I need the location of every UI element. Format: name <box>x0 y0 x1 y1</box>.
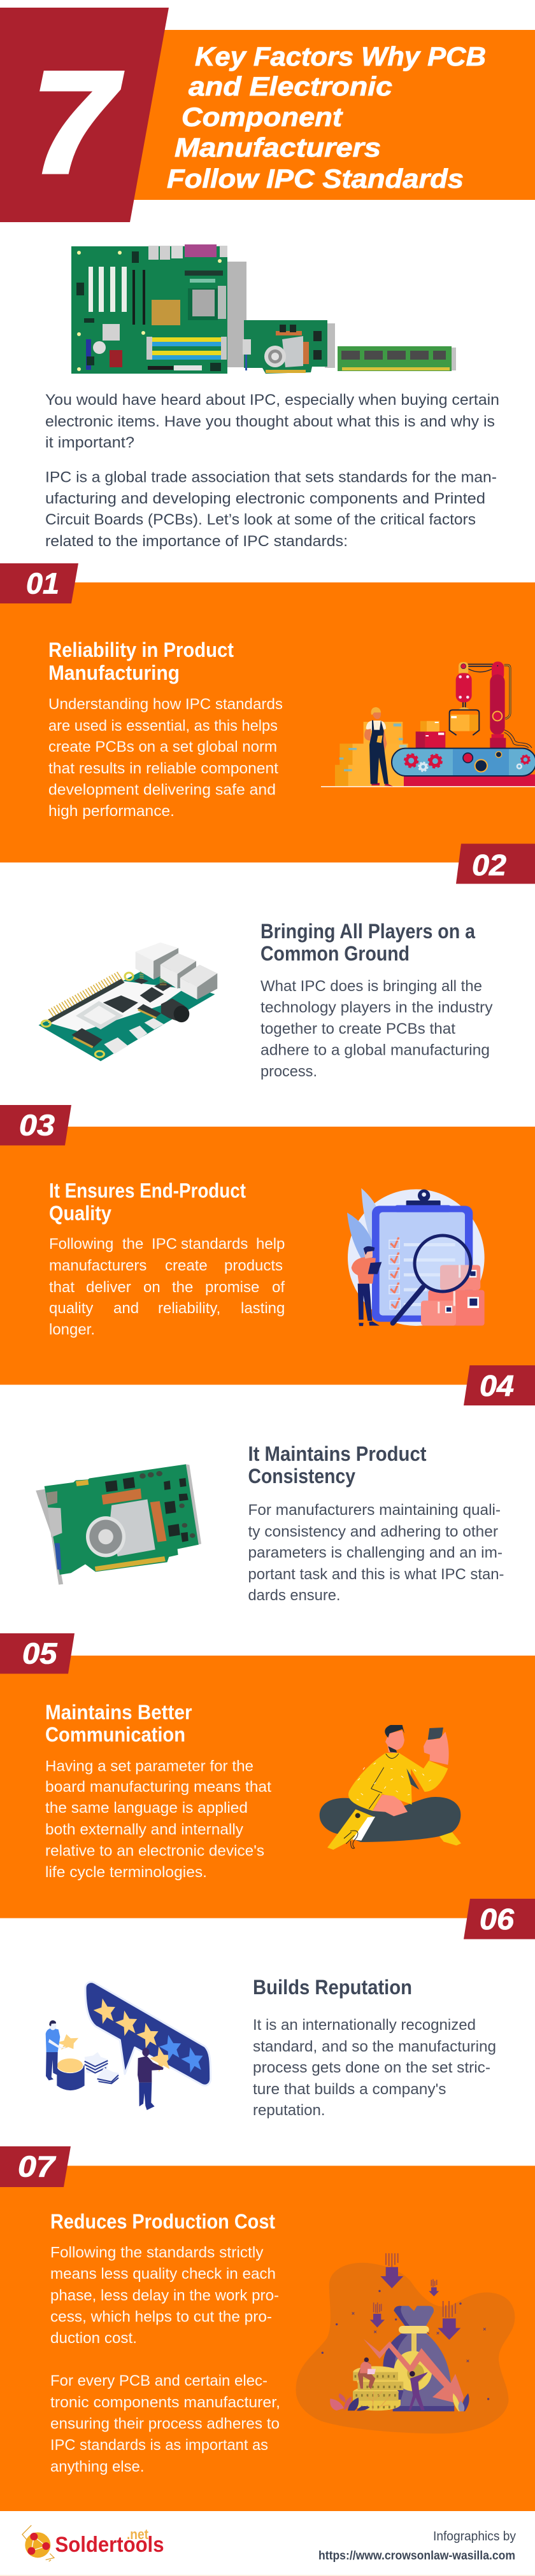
body 05: board manufacturing means that <box>45 1778 271 1796</box>
intro text: electronic items. Have you thought about what this is and why is <box>45 413 495 430</box>
body 04 <box>248 1502 504 1604</box>
body 01: Understanding how IPC standards <box>48 696 283 713</box>
body 01: high performance. <box>48 803 175 820</box>
logo icon <box>22 2525 54 2561</box>
intro text <box>45 391 499 550</box>
body 03: quality <box>49 1300 93 1317</box>
heading 05 <box>45 1701 192 1746</box>
big number 7: 7 <box>32 41 122 202</box>
body 01: create PCBs on a set global norm <box>48 738 277 756</box>
body 04: For manufacturers maintaining quali- <box>248 1502 501 1519</box>
RAM module <box>338 346 456 371</box>
badge 06: 06 <box>480 1903 514 1936</box>
badge 02 <box>456 844 535 883</box>
badge 04 <box>464 1365 535 1405</box>
illustration: single-board computer <box>39 943 217 1061</box>
body 04: ty consistency and adhering to other <box>248 1523 498 1540</box>
body 03: Following <box>49 1235 113 1253</box>
illustration: money bag with falling arrows <box>296 2253 515 2433</box>
motherboard <box>71 244 246 374</box>
body 05: life cycle terminologies. <box>45 1864 207 1881</box>
heading 03: It Ensures End-Product <box>49 1179 246 1202</box>
body 07: Following the standards strictly <box>50 2244 263 2261</box>
heading 01: Reliability in Product <box>48 638 234 661</box>
body 03: create <box>165 1257 208 1274</box>
body 03: longer. <box>49 1321 95 1338</box>
brand name: Soldertools <box>55 2533 164 2557</box>
body 03: promise <box>205 1279 259 1296</box>
body 07: phase, less delay in the work pro- <box>50 2287 279 2304</box>
heading 03: Quality <box>49 1202 111 1225</box>
intro text: You would have heard about IPC, especially when buying certain <box>45 391 499 409</box>
heading 02 <box>260 920 475 965</box>
panel: factor 03 <box>0 1105 535 1385</box>
badge 03: 03 <box>19 1109 55 1142</box>
heading 05: Maintains Better <box>45 1701 192 1724</box>
graphics card <box>243 320 335 374</box>
red slanted panel <box>0 8 169 222</box>
title: Manufacturers <box>175 132 381 162</box>
illustration: seated person with phone <box>320 1725 461 1850</box>
brand suffix: .net <box>127 2526 149 2542</box>
body 07: duction cost. <box>50 2330 137 2347</box>
heading 01: Manufacturing <box>48 661 180 684</box>
badge 05: 05 <box>22 1637 58 1670</box>
badge 03 <box>0 1105 71 1146</box>
body 06: ture that builds a company's <box>253 2081 446 2098</box>
heading 02: Bringing All Players on a <box>260 920 475 943</box>
panel: factor 04 <box>0 1365 535 1656</box>
body 06: It is an internationally recognized <box>253 2016 476 2034</box>
body 05: Having a set parameter for the <box>45 1758 253 1775</box>
body 01: development delivering safe and <box>48 782 276 798</box>
heading 04: It Maintains Product <box>248 1442 427 1465</box>
body 06: reputation. <box>253 2102 325 2119</box>
heading 07: Reduces Production Cost <box>50 2210 275 2233</box>
body 04: dards ensure. <box>248 1587 340 1604</box>
body 03: that <box>49 1279 75 1296</box>
badge 05 <box>0 1633 75 1674</box>
body 06: standard, and so the manufacturing <box>253 2038 496 2055</box>
illustration: star rating speech bubble <box>46 1982 211 2110</box>
body 03: deliver <box>86 1279 131 1296</box>
illustration: checklist and magnifier <box>347 1188 485 1326</box>
body 07: anything else. <box>50 2458 144 2475</box>
heading 04 <box>248 1442 427 1488</box>
logo: Soldertools.net <box>22 2525 164 2561</box>
badge 04: 04 <box>480 1369 514 1402</box>
body 02: process. <box>260 1063 317 1080</box>
heading 03 <box>49 1179 246 1225</box>
panel: factor 07 <box>0 2146 535 2511</box>
body 03: lasting <box>241 1300 285 1317</box>
badge 01 <box>0 563 78 603</box>
body 02: technology players in the industry <box>260 999 493 1016</box>
body 03: reliability, <box>158 1300 220 1317</box>
footer <box>0 2511 535 2576</box>
body 07: ensuring their process adheres to <box>50 2415 280 2433</box>
illustration: graphics card <box>36 1464 201 1585</box>
intro text: Circuit Boards (PCBs). Let’s look at some of the critical factors <box>45 511 476 528</box>
body 03: the <box>172 1279 193 1296</box>
panel: factor 02 <box>0 844 535 1127</box>
body 04: parameters is challenging and an im- <box>248 1544 503 1561</box>
heading 05: Communication <box>45 1723 185 1746</box>
heading 01 <box>48 638 234 684</box>
body 01: that results in reliable component <box>48 760 278 777</box>
body 05: relative to an electronic device's <box>45 1842 264 1860</box>
body 07: means less quality check in each <box>50 2265 276 2283</box>
badge 07: 07 <box>18 2150 57 2183</box>
badge 01: 01 <box>26 567 59 600</box>
header banner <box>0 8 535 222</box>
body 01 <box>48 696 283 820</box>
panel: factor 05 <box>0 1633 535 1918</box>
heading 06: Builds Reputation <box>253 1976 412 1999</box>
badge 02: 02 <box>472 848 506 882</box>
illustration: factory robot arm and worker <box>321 661 535 787</box>
body 03: standards <box>181 1235 248 1253</box>
panel: factor 01 <box>0 563 535 862</box>
orange title band <box>127 30 535 200</box>
credit: https://www.crowsonlaw-wasilla.com <box>318 2549 515 2563</box>
badge 07 <box>0 2146 71 2187</box>
body 07: IPC standards is as important as <box>50 2437 268 2454</box>
title <box>167 41 486 194</box>
body 06 <box>253 2016 496 2119</box>
body 06: process gets done on the set stric- <box>253 2059 490 2076</box>
intro text: ufacturing and developing electronic components and Printed <box>45 490 485 507</box>
body 03: IPC <box>152 1235 177 1253</box>
intro text: it important? <box>45 434 134 451</box>
body 01: are used is essential, as this helps <box>48 717 278 735</box>
body 03: the <box>122 1235 143 1253</box>
body 03: products <box>224 1257 283 1274</box>
body 03: help <box>256 1235 285 1253</box>
body 05: both externally and internally <box>45 1821 243 1838</box>
body 04: portant task and this is what IPC stan- <box>248 1566 504 1583</box>
body 02: together to create PCBs that <box>260 1020 455 1038</box>
title: Key Factors Why PCB <box>195 41 486 71</box>
hero image: PCB boards <box>71 244 456 374</box>
body 03: manufacturers <box>49 1257 146 1274</box>
panel: factor 06 <box>0 1899 535 2165</box>
body 03: and <box>113 1300 139 1317</box>
body 05: the same language is applied <box>45 1799 248 1817</box>
credit <box>318 2530 516 2563</box>
heading 04: Consistency <box>248 1465 355 1488</box>
title: Component <box>182 102 343 132</box>
intro text: IPC is a global trade association that sets standards for the man- <box>45 468 497 486</box>
body 02: What IPC does is bringing all the <box>260 978 482 995</box>
title: and Electronic <box>189 71 392 101</box>
body 03 <box>49 1235 285 1338</box>
body 02: adhere to a global manufacturing <box>260 1041 490 1059</box>
body 03: on <box>143 1279 160 1296</box>
body 07: For every PCB and certain elec- <box>50 2372 268 2389</box>
heading 02: Common Ground <box>260 942 410 965</box>
body 07 <box>50 2244 280 2475</box>
body 05 <box>45 1758 271 1881</box>
body 07: cess, which helps to cut the pro- <box>50 2308 272 2326</box>
body 03: of <box>272 1279 285 1296</box>
body 02 <box>260 978 493 1080</box>
body 07: tronic components manufacturer, <box>50 2394 280 2411</box>
credit: Infographics by <box>433 2530 516 2544</box>
badge 06 <box>464 1899 535 1939</box>
intro text: related to the importance of IPC standards: <box>45 533 348 550</box>
title: Follow IPC Standards <box>167 164 464 194</box>
